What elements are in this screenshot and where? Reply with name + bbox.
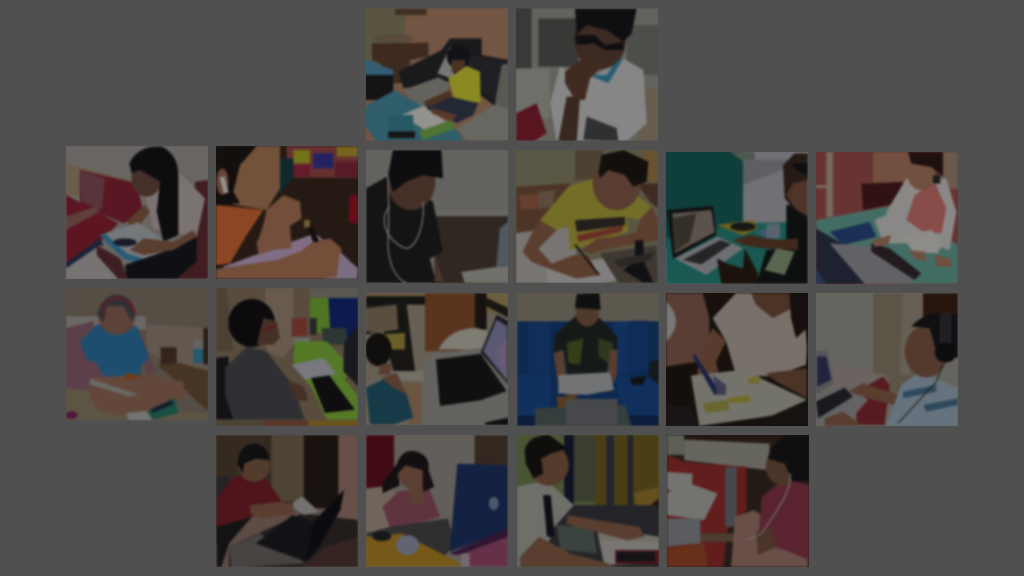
photo: boy with glasses and white t-shirt [516,8,658,140]
photo: teen with headphones at laptop on desk [816,293,958,426]
photo: boy in maroon shirt with black laptop [216,435,358,567]
photo: toddler watching laptop on marble table [366,293,508,425]
photo: girl with long hair reading on red sofa [66,146,208,279]
photo: boy in yellow shirt on sofa [366,8,508,140]
photo: student at laptop by teal wall [666,152,808,284]
photo: boy in maroon shirt with earphones by red bedspread [667,435,809,567]
photo: girl with red headphones and blue Dell laptop [366,435,508,567]
photo: boy with red glasses at green desk with keyboard [216,288,358,426]
photo: girl in blue top with headphones sitting cross-legged [66,288,208,420]
photo: small girl with headset on bed [816,152,958,284]
photo: woman in lace top highlighting a book [666,293,808,426]
photo: boy in yellow London t-shirt writing [516,150,658,283]
photo: schoolboy in uniform and tie writing by window [517,435,659,567]
photo: girl in black top with white earphones [366,150,508,283]
photo: young man in cap on blue sofa with MacBook [517,293,659,426]
photo: young girl in orange writing at table [216,146,358,279]
